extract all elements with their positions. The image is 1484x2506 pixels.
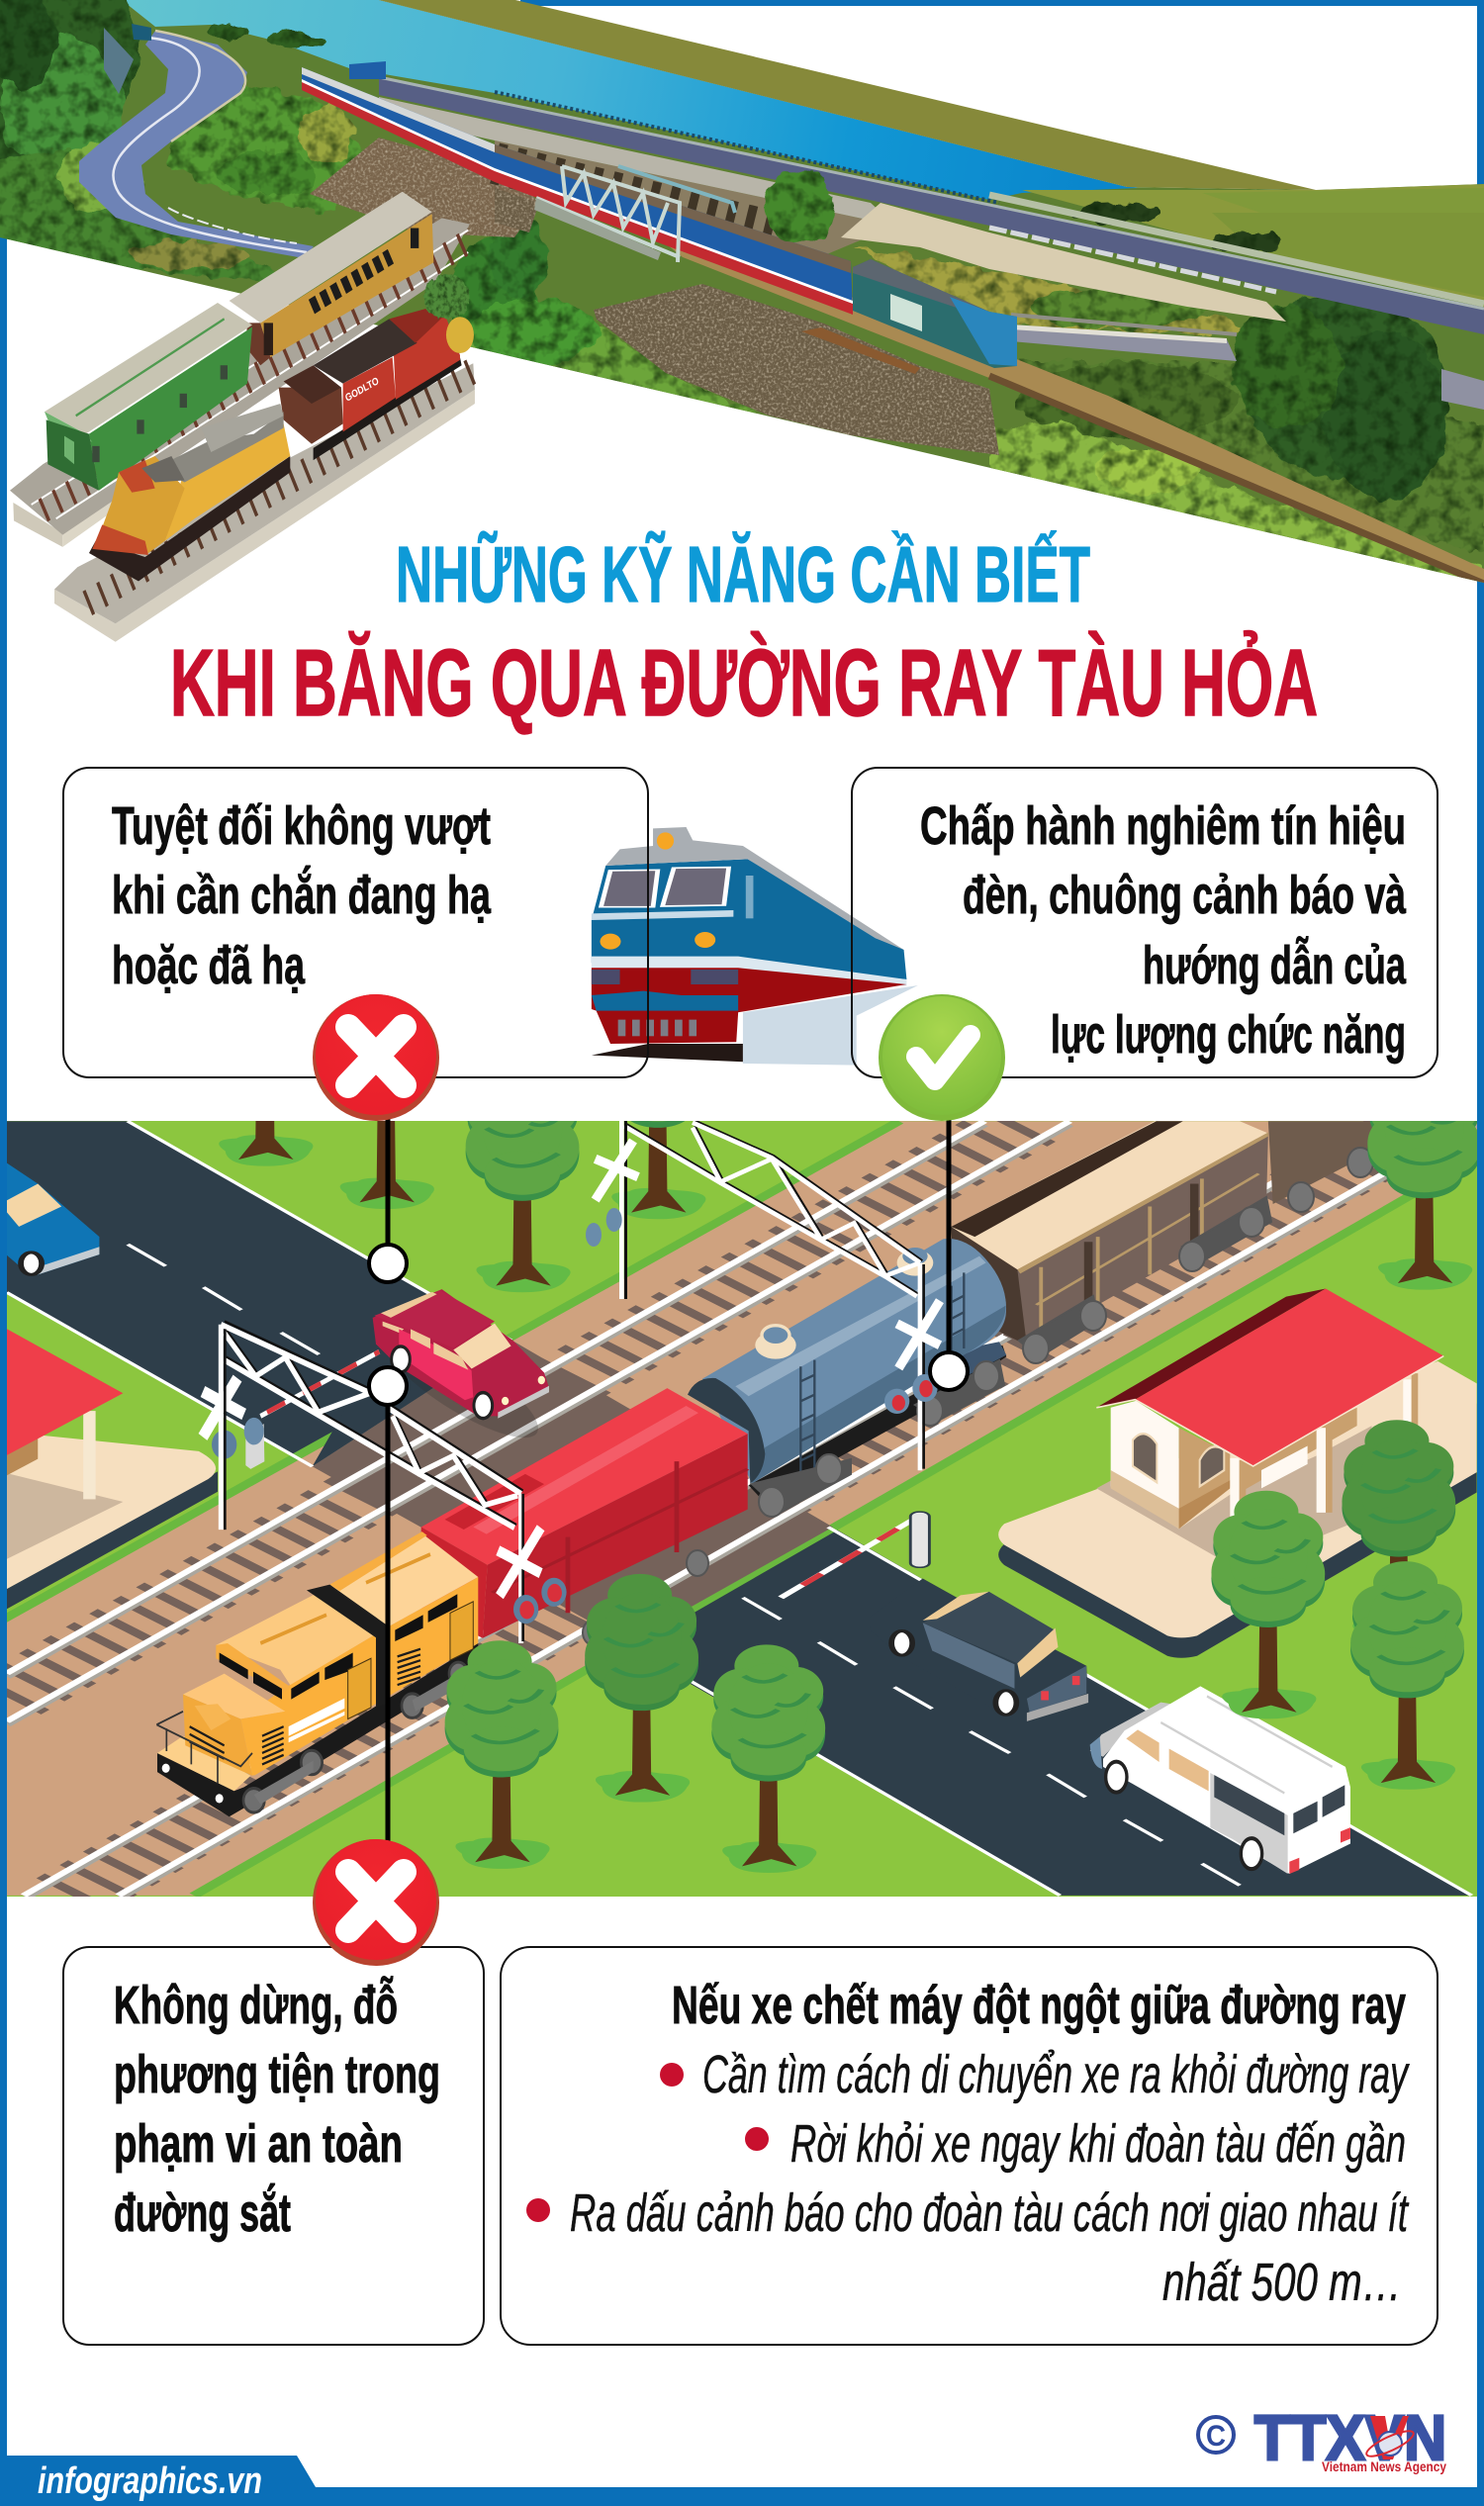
foliage masses xyxy=(0,0,1484,594)
panel: obey signals xyxy=(852,768,1438,1077)
text: barrier warning: khi cần chắn đang hạ xyxy=(112,866,492,925)
text: barrier warning xyxy=(112,796,492,995)
illustration: miniature trains on tracks xyxy=(10,192,475,642)
winding road xyxy=(79,24,314,258)
isometric level crossing scene xyxy=(7,1121,1477,1897)
track slab: upper xyxy=(10,218,470,547)
connector line: top red marker xyxy=(369,1108,407,1282)
ground, road and tracks xyxy=(0,1108,1484,1915)
logo: TTXVN: TTXVN xyxy=(1254,2402,1446,2473)
connector line: bottom red marker xyxy=(369,1367,407,1845)
wagon: brown xyxy=(951,1121,1268,1346)
dried bush xyxy=(446,317,474,353)
bush behind locomotive xyxy=(423,274,470,319)
text: do not stop xyxy=(114,1976,440,2243)
lower road xyxy=(1011,315,1484,410)
locomotive: red: GODLTO xyxy=(344,375,381,405)
barrier arm xyxy=(260,1351,379,1416)
background trees xyxy=(208,938,1481,1292)
beige slope xyxy=(841,203,1286,322)
bridge truss xyxy=(534,166,735,262)
text: obey signals xyxy=(920,796,1407,1065)
red car xyxy=(373,1289,549,1455)
fields xyxy=(1022,184,1484,307)
bullet list: nhất 500 m… xyxy=(1162,2253,1402,2312)
wagon: brown rear xyxy=(1268,1121,1377,1204)
bullet list xyxy=(526,2045,1410,2312)
text: do not stop: Không dừng, đỗ xyxy=(114,1976,398,2035)
yellow locomotive xyxy=(156,1531,478,1816)
gantry xyxy=(221,1322,524,1643)
van: white xyxy=(1090,1686,1350,1874)
lower-right barrier xyxy=(781,1512,929,1598)
text: do not stop: phạm vi an toàn xyxy=(114,2114,403,2174)
icon: red cross marker top xyxy=(313,994,439,1121)
panel: if the vehicle stalls xyxy=(501,1947,1438,2345)
header photo band xyxy=(0,0,1484,594)
car: blue xyxy=(0,1159,99,1274)
railway embankment xyxy=(670,247,1484,583)
rock embankments xyxy=(310,138,999,455)
title line 1: NHỮNG KỸ NĂNG CẦN BIẾT xyxy=(396,530,1090,618)
icon: red cross marker bottom xyxy=(313,1839,439,1966)
text: do not stop: đường sắt xyxy=(114,2183,291,2243)
illustration: locomotive xyxy=(592,827,918,1066)
car: black sedan xyxy=(869,1579,1088,1721)
text: barrier warning: Tuyệt đối không vượt xyxy=(112,796,491,856)
panel: do not stop on tracks xyxy=(63,1947,484,2345)
logo: TTXVN: C xyxy=(1206,2420,1226,2453)
road vehicles xyxy=(0,1159,1088,1721)
tree by the bridge xyxy=(764,168,835,243)
connector line: green marker xyxy=(930,1113,968,1390)
text: do not stop: phương tiện trong xyxy=(114,2045,440,2104)
foreground trees xyxy=(445,1420,1464,1873)
track slab: lower xyxy=(54,363,475,642)
icon: green check marker xyxy=(879,994,1005,1121)
footer tab: infographics.vn: infographics.vn xyxy=(38,2460,262,2502)
sea xyxy=(122,0,1138,200)
wagon bogies xyxy=(583,1148,1373,1645)
locomotive: red xyxy=(279,309,462,460)
right station xyxy=(998,1288,1477,1658)
wagon: green xyxy=(45,303,252,491)
highway viaduct xyxy=(379,77,1484,334)
locomotive: yellow xyxy=(89,404,290,582)
text: barrier warning: hoặc đã hạ xyxy=(112,936,306,995)
wagon: red xyxy=(421,1388,748,1638)
upper gantry and signal xyxy=(586,1118,940,1470)
red car and lower gantry xyxy=(203,1289,567,1643)
panel: do not cross when barrier lowering xyxy=(63,768,648,1077)
passenger train xyxy=(302,67,1017,368)
tank wagon xyxy=(688,1239,1006,1500)
logo: TTXVN: Vietnam News Agency xyxy=(1322,2459,1446,2474)
wagon: tan xyxy=(230,192,433,365)
olive diagonal stripe xyxy=(379,0,1316,190)
coach on highway xyxy=(349,61,386,79)
left station xyxy=(0,1325,218,1613)
